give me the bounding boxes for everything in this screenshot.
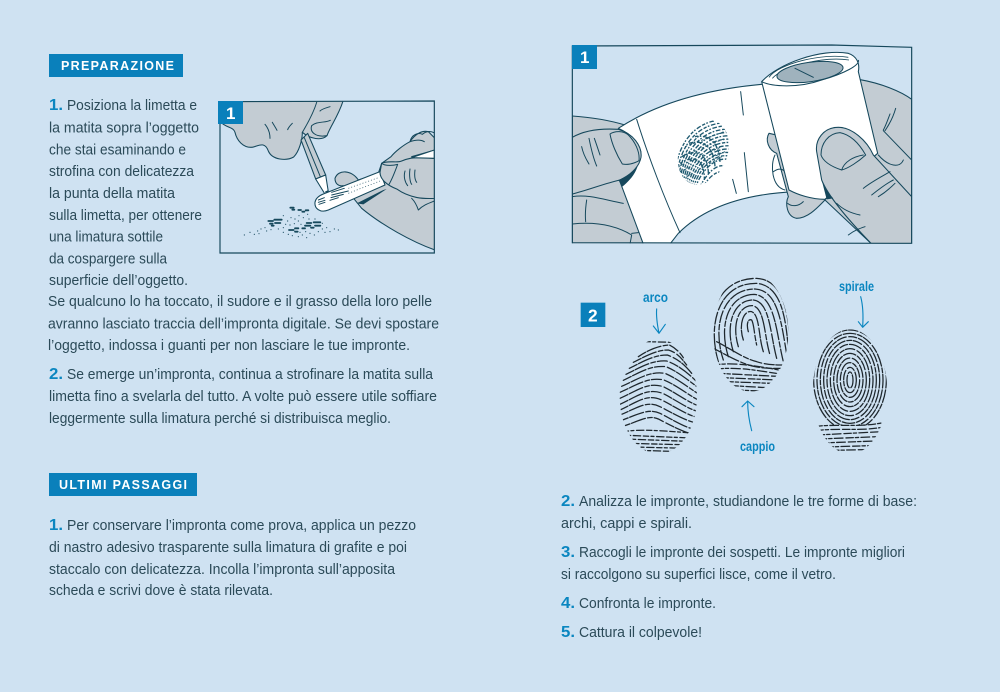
- heading: preparazione: [49, 54, 183, 77]
- text block: step 2: 2.: [561, 493, 575, 510]
- badge: 2: [581, 303, 605, 327]
- text block: step 1: l’oggetto, indossa i guanti per non lasciare le tue impronte.: [48, 338, 410, 354]
- fingerprint: whorl: [812, 330, 888, 456]
- frame: [572, 45, 912, 243]
- pencil: [301, 133, 326, 179]
- text block: step 1: la matita sopra l’oggetto: [49, 120, 199, 136]
- badge: 1: [572, 45, 597, 69]
- heading: preparazione: PREPARAZIONE: [61, 59, 174, 73]
- text block: final step: Per conservare l’impronta come prova, applica un pezzo: [67, 518, 416, 534]
- tape strip: [618, 84, 795, 244]
- roll inner core: [776, 60, 844, 84]
- text block: step 1: da cospargere sulla: [49, 252, 168, 268]
- text block: step 1: superficie dell’oggetto.: [49, 273, 188, 289]
- left thumb: [572, 129, 641, 194]
- text block: step 2: Se emerge un’impronta, continua a strofinare la matita sulla: [67, 367, 434, 383]
- graphite dust: [244, 208, 338, 238]
- label: cappio: cappio: [740, 439, 775, 454]
- text block: final step: 1.: [49, 517, 63, 534]
- illustration: pencil and nail file: [220, 100, 435, 253]
- nail and finger creases: [265, 102, 330, 138]
- file marks: [318, 188, 348, 204]
- text block: step 4: 4.: [561, 595, 575, 612]
- text block: step 3: [561, 544, 905, 583]
- fingerprint: loop: [711, 278, 790, 391]
- text block: final step: [49, 517, 416, 599]
- text block: step 1: 1.: [49, 97, 63, 114]
- fingers behind the roll: [767, 133, 825, 218]
- right hand behind the roll: [825, 79, 912, 244]
- right hand: [335, 131, 435, 250]
- frame: [220, 101, 434, 253]
- badge: 1: 1: [580, 48, 589, 67]
- text block: step 2: [561, 493, 917, 532]
- text block: step 2: leggermente sulla limatura perché si distribuisca meglio.: [49, 411, 391, 427]
- text block: step 1: una limatura sottile: [49, 230, 163, 246]
- tape fingerprint: [678, 120, 729, 184]
- panel: remaining steps: [561, 493, 917, 641]
- text block: final step: scheda e scrivi dove è stata rilevata.: [49, 583, 273, 599]
- badge: 2: 2: [588, 306, 598, 326]
- tape roll: [762, 52, 878, 199]
- heading: ultimi passaggi: [49, 473, 197, 496]
- text block: final step: di nastro adesivo trasparente sulla limatura di grafite e poi: [49, 540, 407, 556]
- badge: 1: [218, 101, 243, 124]
- text block: step 5: 5.: [561, 624, 575, 641]
- text block: step 2: 2.: [49, 366, 63, 383]
- text block: step 1: Posiziona la limetta e: [67, 98, 197, 114]
- text block: step 1: che stai esaminando e: [49, 142, 186, 158]
- text block: step 3: Raccogli le impronte dei sospetti. Le impronte migliori: [579, 545, 905, 561]
- fingers behind the tape: [572, 180, 638, 244]
- label: arco: arco: [643, 290, 668, 305]
- text block: step 5: Cattura il colpevole!: [579, 625, 702, 641]
- nail file: [315, 172, 385, 211]
- text block: step 3: 3.: [561, 544, 575, 561]
- label: spirale: [839, 279, 874, 327]
- arrow: cappio: [742, 401, 754, 431]
- illustration: three fingerprint types: [581, 278, 888, 456]
- thumb over the file: [380, 157, 435, 199]
- text block: step 2: [49, 366, 437, 427]
- text block: step 1: sulla limetta, per ottenere: [49, 208, 202, 224]
- heading: ultimi passaggi: ULTIMI PASSAGGI: [59, 478, 187, 492]
- label: spirale: spirale: [839, 279, 874, 294]
- arrow: spirale: [858, 297, 868, 327]
- text block: final step: staccalo con delicatezza. Incolla l’impronta sull’apposita: [49, 562, 396, 578]
- label: cappio: [740, 401, 775, 454]
- panel: ultimi passaggi: [49, 473, 416, 599]
- text block: step 1: avranno lasciato traccia dell’impronta digitale. Se devi spostare: [48, 316, 439, 332]
- text block: step 1: strofina con delicatezza: [49, 164, 195, 180]
- text block: step 1: Se qualcuno lo ha toccato, il sudore e il grasso della loro pelle: [48, 294, 432, 310]
- right thumb: [816, 127, 912, 244]
- text block: step 3: si raccolgono su superfici lisce, come il vetro.: [561, 567, 836, 583]
- left hand: [572, 116, 643, 244]
- illustration: adhesive tape: [572, 45, 912, 244]
- arrow: arco: [653, 309, 665, 333]
- pencil tip: [315, 174, 329, 194]
- panel: preparazione: [48, 54, 439, 427]
- text block: step 1: [48, 97, 439, 354]
- text block: step 1: la punta della matita: [49, 186, 176, 202]
- text block: step 4: Confronta le impronte.: [579, 596, 716, 612]
- left hand: [220, 100, 343, 159]
- text block: step 2: Analizza le impronte, studiandone le tre forme di base:: [579, 494, 917, 510]
- text block: step 2: limetta fino a svelarla del tutto. A volte può essere utile soffiare: [49, 389, 437, 405]
- label: arco: [643, 290, 668, 333]
- badge: 1: 1: [226, 104, 235, 123]
- fingerprint: arch: [620, 342, 698, 452]
- text block: step 2: archi, cappi e spirali.: [561, 516, 692, 532]
